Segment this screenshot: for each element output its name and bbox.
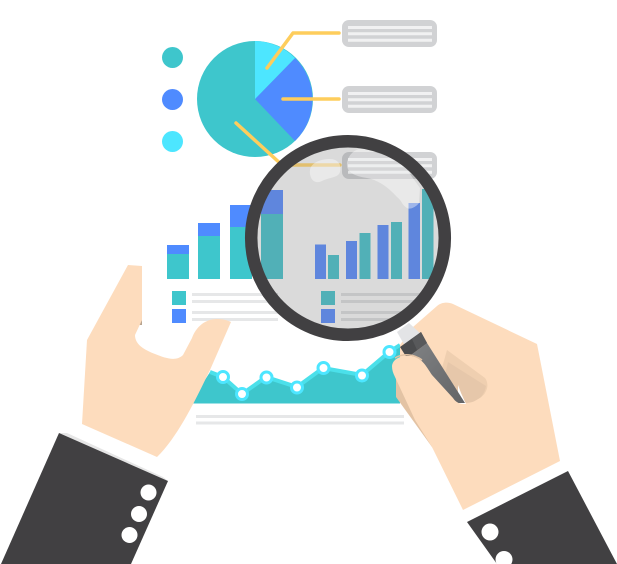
finger shadow behind [396,375,440,447]
bar chart legend [172,291,278,323]
left sleeve [1,433,168,564]
area chart caption lines [196,416,404,423]
callout connector lines [236,33,340,165]
gripping finger [392,356,480,460]
lens glare [310,148,420,209]
left cuff buttons [122,484,156,543]
area line chart [190,345,400,404]
finger crease [395,355,422,360]
palm crease shadow [440,350,487,403]
pie chart [197,41,313,157]
handle [400,332,465,403]
right sleeve [467,471,617,564]
magnified bars [261,189,434,279]
magnified legend [276,291,420,323]
white gap by handle [458,385,466,404]
left hand [82,265,231,457]
right hand [392,303,560,510]
callout label boxes [342,20,437,179]
magnifier ring [251,141,445,335]
pie legend dots [162,47,183,152]
magnified yellow connector [292,163,342,167]
palm [400,303,560,510]
right cuff buttons [482,524,512,564]
magnifier collar [397,323,421,346]
bar chart [167,205,252,279]
lens view [258,148,438,328]
magnified label box [342,152,416,179]
